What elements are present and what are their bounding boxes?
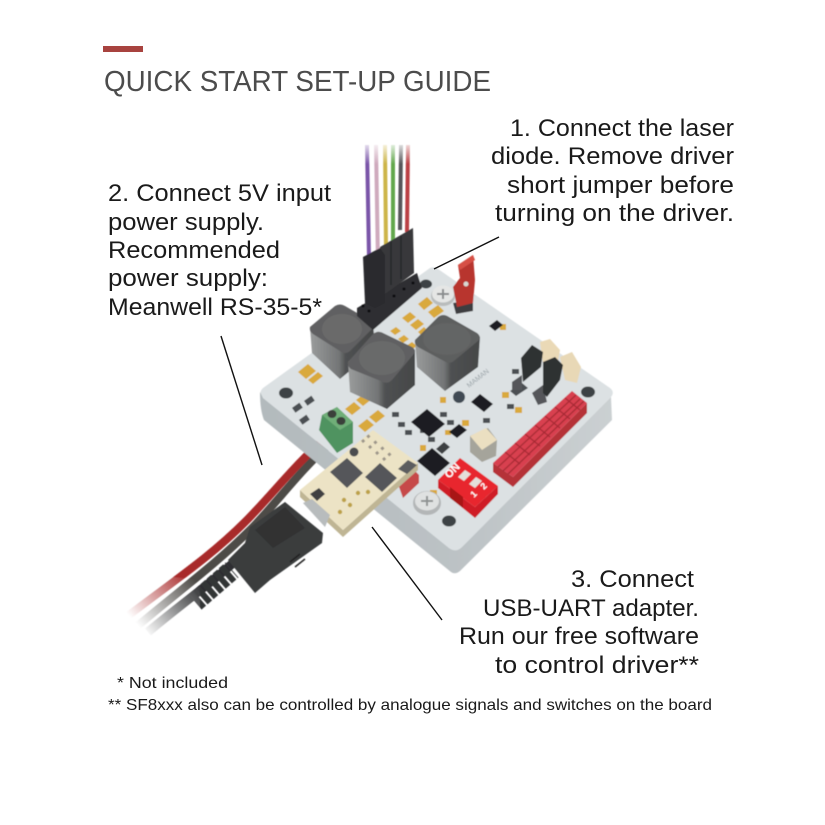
step 3 text: 3. Connect [571,566,694,593]
step 2 text: power supply: [108,265,268,292]
red DIP switch: ON [443,461,463,481]
lower screw [413,491,441,515]
dark jumpers and cream connectors [512,339,581,405]
small SMD parts: MAMAN [466,368,491,390]
step 3 text: to control driver** [495,652,699,679]
red pin socket [493,391,587,487]
step 1 text: 1. Connect the laser [510,115,734,142]
title: QUICK START SET-UP GUIDE [104,66,491,98]
step 1 text: diode. Remove driver [491,143,734,170]
footnotes: ** SF8xxx also can be controlled by analogue signals and switches on the board [108,697,712,714]
mounting holes [279,280,595,526]
leader line: power supply [221,336,262,465]
red driver short jumper [453,255,475,314]
product photo: laser driver board [110,140,613,650]
step 2 text: Recommended [108,237,280,264]
accent bar [103,46,143,52]
inductor 3 [415,315,480,391]
step 2 text: 2. Connect 5V input [108,180,331,207]
red DIP switch [438,458,498,518]
step 2 text: power supply. [108,209,264,236]
red connector under adapter [398,470,419,498]
rainbow ribbon wires [360,140,416,264]
screw near jumper [431,286,455,306]
footnotes: * Not included [117,675,228,692]
step 3 text: Run our free software [459,623,699,650]
USB-UART adapter [300,430,418,537]
green terminal block [319,407,353,453]
step 3 text: USB-UART adapter. [483,595,699,622]
power cables [125,437,330,628]
leader line: laser diode [434,237,499,269]
red DIP switch: 1 [468,489,479,499]
inductor 1 [310,304,375,379]
step 2 text [108,180,331,321]
red DIP switch: 2 [478,481,489,491]
footnotes [108,675,712,714]
cream trimmer [470,428,497,462]
USB cable [148,499,330,632]
logo mark [453,391,465,403]
step 1 text: turning on the driver. [495,200,734,227]
cable fade out [110,570,200,650]
step 2 text: Meanwell RS-35-5* [108,294,322,321]
pin header connector [357,228,422,330]
small SMD parts [292,297,528,496]
step 1 text: short jumper before [507,172,734,199]
step 1 text [491,115,734,227]
step 3 text [459,566,699,679]
inductor 2 [348,332,415,409]
board base [260,267,613,573]
leader line: USB-UART [372,527,442,620]
